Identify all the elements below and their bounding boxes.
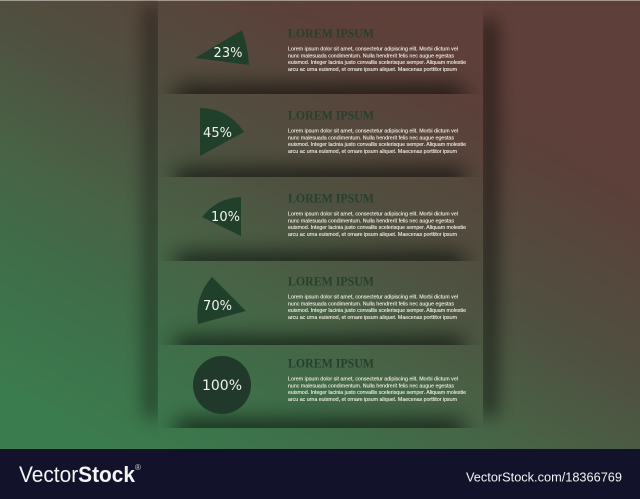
body text row 2: nunc malesuada condimentum. Nulla hendrerit felis nec augue egestas <box>288 135 454 141</box>
pie wedge 70%: 70% <box>203 299 232 314</box>
pie wedge 23%: 23% <box>214 46 242 61</box>
panel side shadows <box>146 6 495 418</box>
row shadows <box>176 87 464 441</box>
body text row 5: arcu ac urna euismod, et ornare ipsum aliquet. Maecenas porttitor ipsum <box>288 397 457 403</box>
panel: row 3 <box>202 192 466 238</box>
body text row 4 <box>288 294 466 321</box>
body text row 1 <box>288 46 466 73</box>
panel: row 1 <box>195 26 466 73</box>
registered mark: ® <box>135 463 141 472</box>
body text row 5: Lorem ipsum dolor sit amet, consectetur adipiscing elit. Morbi dictum vel <box>288 376 458 382</box>
footer logo: VectorStock <box>19 462 136 487</box>
body text row 3: Lorem ipsum dolor sit amet, consectetur adipiscing elit. Morbi dictum vel <box>288 212 458 218</box>
body text row 1: euismod. Integer lacinia justo convallis scelerisque semper. Aliquam molestie <box>288 60 466 66</box>
heading row 3: LOREM IPSUM <box>288 192 374 206</box>
heading row 2: LOREM IPSUM <box>288 108 374 122</box>
panel: row 4 <box>197 274 466 324</box>
body text row 1: nunc malesuada condimentum. Nulla hendrerit felis nec augue egestas <box>288 53 454 59</box>
body text row 4: euismod. Integer lacinia justo convallis scelerisque semper. Aliquam molestie <box>288 308 466 314</box>
footer bar <box>0 449 640 499</box>
body text row 2: euismod. Integer lacinia justo convallis scelerisque semper. Aliquam molestie <box>288 142 466 148</box>
pie circle 100% <box>193 356 251 414</box>
body text row 4: arcu ac urna euismod, et ornare ipsum aliquet. Maecenas porttitor ipsum <box>288 315 457 321</box>
body text row 2: arcu ac urna euismod, et ornare ipsum aliquet. Maecenas porttitor ipsum <box>288 149 457 155</box>
panel: row 2 <box>200 108 466 156</box>
panel: row 5 <box>193 356 466 414</box>
pie wedge 10%: 10% <box>211 210 240 225</box>
body text row 2 <box>288 128 466 155</box>
body text row 5 <box>288 376 466 403</box>
pie circle 100%: 100% <box>202 378 242 394</box>
body text row 5: nunc malesuada condimentum. Nulla hendrerit felis nec augue egestas <box>288 383 454 389</box>
footer url: VectorStock.com/18366769 <box>466 470 622 484</box>
body text row 5: euismod. Integer lacinia justo convallis scelerisque semper. Aliquam molestie <box>288 390 466 396</box>
body text row 4: Lorem ipsum dolor sit amet, consectetur adipiscing elit. Morbi dictum vel <box>288 294 458 300</box>
body text row 1: arcu ac urna euismod, et ornare ipsum aliquet. Maecenas porttitor ipsum <box>288 67 457 73</box>
body text row 3: euismod. Integer lacinia justo convallis scelerisque semper. Aliquam molestie <box>288 225 466 231</box>
body text row 3 <box>288 212 466 238</box>
body text row 4: nunc malesuada condimentum. Nulla hendrerit felis nec augue egestas <box>288 301 454 307</box>
body text row 2: Lorem ipsum dolor sit amet, consectetur adipiscing elit. Morbi dictum vel <box>288 128 458 134</box>
heading row 5: LOREM IPSUM <box>288 356 374 370</box>
body text row 3: arcu ac urna euismod, et ornare ipsum aliquet. Maecenas porttitor ipsum <box>288 232 457 238</box>
pie wedge 45% <box>200 108 244 156</box>
body text row 1: Lorem ipsum dolor sit amet, consectetur adipiscing elit. Morbi dictum vel <box>288 46 458 52</box>
pie wedge 70% <box>197 277 246 324</box>
body text row 3: nunc malesuada condimentum. Nulla hendrerit felis nec augue egestas <box>288 218 454 224</box>
heading row 4: LOREM IPSUM <box>288 274 374 288</box>
pie wedge 23% <box>195 30 249 65</box>
pie wedge 10% <box>202 197 241 236</box>
heading row 1: LOREM IPSUM <box>288 26 374 40</box>
pie wedge 45%: 45% <box>203 126 232 141</box>
